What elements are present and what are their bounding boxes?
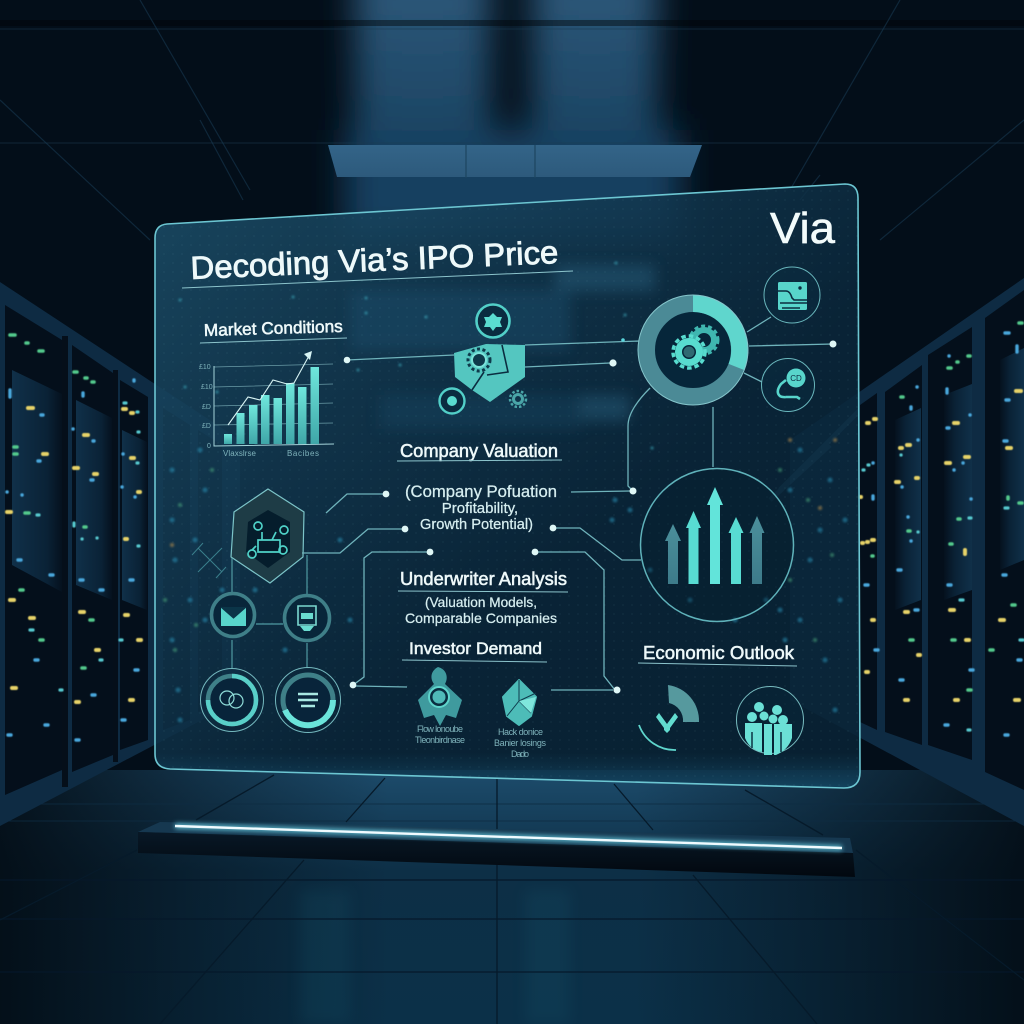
description: (Valuation Models, [425,594,537,610]
caption left: Flow lonoube [417,724,463,734]
icon: people group [736,686,804,755]
heading: Investor Demand [409,639,542,658]
icon: coin in hand [762,358,814,412]
connector [344,355,454,363]
growth circle with arrows [640,468,794,622]
caption right: Hack donice [498,727,543,737]
icon: shield with gears [440,304,526,414]
section: company valuation [397,441,562,533]
glass panel [155,180,860,790]
caption right [494,727,546,759]
heading: Market Conditions [204,317,343,340]
section: market conditions [199,317,454,458]
section: economic outlook [638,643,804,755]
connectors: shield to donut [525,338,640,367]
server racks: left aisle [0,282,240,826]
bar chart: £10 [199,364,211,371]
status LEDs [7,323,1023,740]
icon: faceted gem chart [503,680,536,725]
caption right: Dado [511,749,529,759]
glowing display stand [138,822,855,877]
icon: terminal [284,596,330,640]
section: underwriter analysis [398,568,568,626]
bar chart: £D [202,404,211,411]
donut gear gauge [638,295,748,405]
bar chart: £D [202,423,211,430]
description: Growth Potential) [420,516,533,533]
connectors from hexagon [192,491,433,688]
description: (Company Pofuation [405,482,557,501]
icon: gauge [639,685,699,750]
ceiling light panel [328,145,702,178]
connector: donut to growth circle [571,388,713,494]
icon: envelope [212,594,254,636]
connectors to growth circle [532,525,641,694]
floor [0,770,1024,1024]
caption left: Tleonbirdnase [415,735,465,745]
icon: gears [673,326,718,368]
bar chart: Bacibes [287,449,319,458]
description [405,594,557,626]
caption left [415,724,465,745]
bokeh data particles [165,263,845,720]
bar chart [199,351,334,458]
bar chart: Vlaxslrse [223,449,257,458]
icon: ring with linked circles [200,668,264,732]
bar chart: 0 [207,443,211,450]
section: investor demand [402,639,547,759]
description [405,482,557,533]
heading: Economic Outlook [643,643,795,663]
heading: Company Valuation [400,441,558,461]
server racks: right aisle [790,278,1024,826]
brand name: Via [770,204,836,253]
icon: payment card [744,267,836,382]
icon: investor figure [418,667,462,726]
icon: coin in hand: CD [790,374,802,383]
caption right: Banier losings [494,738,546,748]
icon: progress ring [276,668,340,732]
description: Profitability, [442,500,518,517]
ceiling light beams [345,0,680,240]
description: Comparable Companies [405,610,557,626]
heading: Underwriter Analysis [400,568,567,589]
title: Decoding Via’s IPO Price [190,234,559,286]
hexagon process icon [231,489,304,583]
bar chart: £10 [201,384,213,391]
